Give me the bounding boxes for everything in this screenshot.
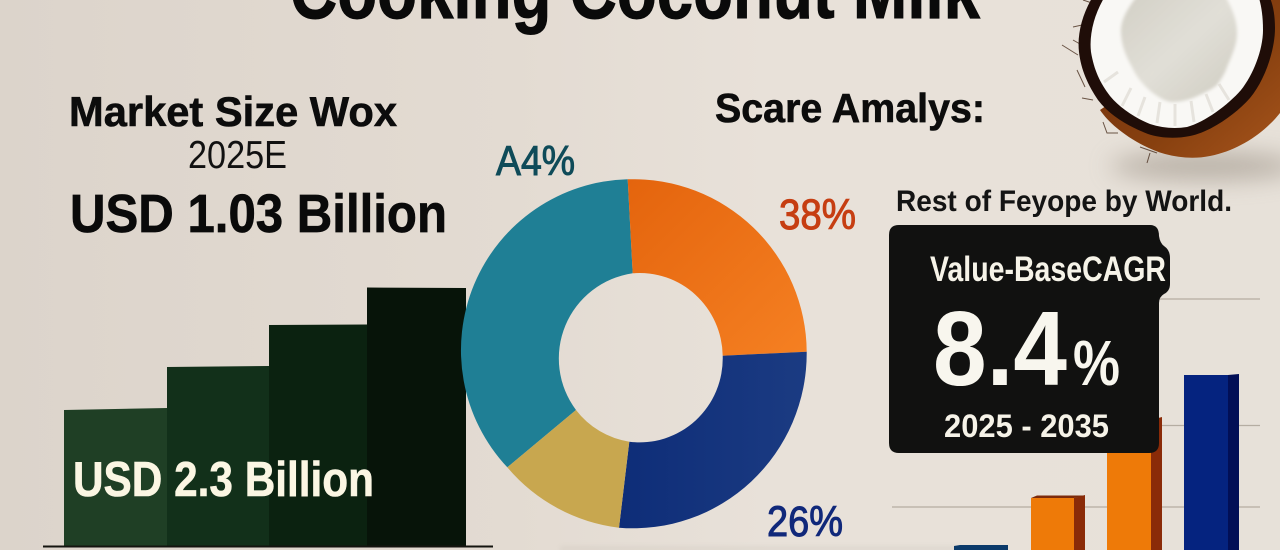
segment: teal <box>461 179 633 467</box>
coconut cavity <box>1121 0 1237 102</box>
bar 2 <box>167 366 269 546</box>
chart: stepped green bars <box>43 288 493 548</box>
callout box <box>889 225 1170 453</box>
coconut flesh ribs <box>1104 72 1229 126</box>
icon: halved coconut <box>1062 0 1280 180</box>
bar: orange short <box>1031 495 1085 550</box>
coconut shadow <box>1110 152 1280 180</box>
bar: blue tall <box>1184 374 1239 550</box>
label: A4%: A4% <box>496 137 575 184</box>
bar: orange tall <box>1107 417 1162 550</box>
panel: market size <box>69 88 447 244</box>
segment: gold <box>507 410 629 528</box>
coconut fibres <box>1062 0 1157 163</box>
segment: orange <box>628 179 807 356</box>
segment: navy <box>619 352 807 528</box>
callout: CAGR <box>889 225 1170 453</box>
text: year 2025E: 2025E <box>188 134 287 177</box>
bar: small navy <box>954 545 1008 550</box>
grid lines <box>892 299 1260 507</box>
bar 1 <box>64 408 167 546</box>
bar 3 <box>269 324 367 546</box>
coconut flesh <box>1091 0 1263 128</box>
text: Value-Base CAGR: Value-BaseCAGR <box>930 250 1166 289</box>
value: 8.4: 8.4 <box>933 290 1067 408</box>
heading: market size: Market Size Wox <box>69 88 398 135</box>
coconut dark ring <box>1079 0 1275 138</box>
heading: share analysis: Scare Amalys: <box>715 85 985 131</box>
bar 4 <box>367 288 466 546</box>
label: 26%: 26% <box>767 498 843 546</box>
heading: rest of world: Rest of Feyope by World. <box>896 185 1232 218</box>
label: 38%: 38% <box>779 191 856 239</box>
chart: donut share <box>461 179 807 528</box>
baseline <box>43 546 493 548</box>
value: percent sign: % <box>1073 327 1120 399</box>
value: USD 1.03 Billion: USD 1.03 Billion <box>70 184 447 244</box>
chart: CAGR bars <box>954 374 1239 550</box>
value: USD 2.3 Billion: USD 2.3 Billion <box>73 453 374 507</box>
text: period: 2025 - 2035 <box>944 408 1109 444</box>
coconut shell <box>1100 0 1280 158</box>
